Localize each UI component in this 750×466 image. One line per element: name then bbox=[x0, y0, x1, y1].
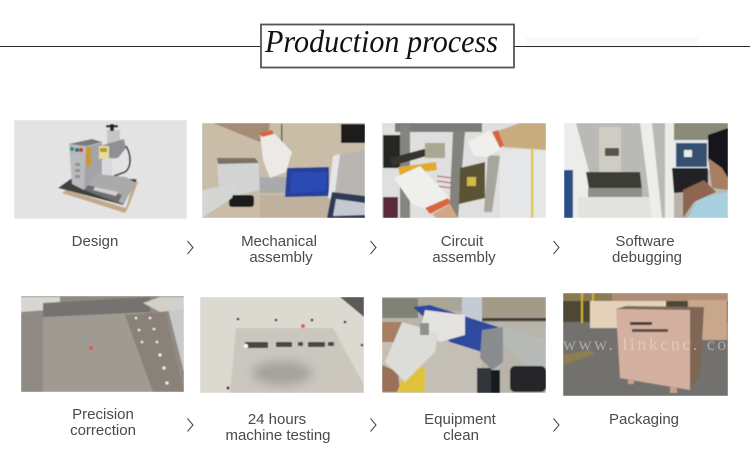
step 6: 24 hours machine testing bbox=[200, 297, 364, 444]
label bbox=[612, 233, 682, 266]
photo: marked steel plate on table bbox=[200, 297, 364, 393]
label bbox=[432, 233, 496, 266]
label: debugging bbox=[612, 249, 682, 266]
step 5: precision correction bbox=[21, 296, 184, 439]
step 4: software debugging bbox=[564, 123, 728, 266]
photo: gloved hands wiring circuit bbox=[382, 123, 546, 218]
label: Packaging bbox=[609, 411, 679, 428]
photo: metal plate with red laser point bbox=[21, 296, 184, 392]
arrow bbox=[188, 418, 193, 432]
arrow bbox=[554, 241, 559, 254]
step 1: design bbox=[14, 120, 187, 250]
photo: laser marking machine on pallet bbox=[14, 120, 187, 219]
step 7: equipment clean bbox=[382, 297, 546, 444]
photo: engineer at laptop beside cabinet bbox=[564, 123, 728, 218]
label: Software bbox=[615, 233, 675, 250]
label: assembly bbox=[249, 249, 313, 266]
label bbox=[241, 233, 317, 266]
arrow bbox=[370, 241, 376, 254]
label: Circuit bbox=[441, 233, 484, 250]
photo: wooden crate in warehouse bbox=[563, 293, 728, 396]
step 2: mechanical assembly bbox=[202, 123, 365, 266]
step 8: packaging bbox=[563, 293, 728, 427]
arrow bbox=[554, 418, 559, 432]
label: Precision bbox=[72, 406, 134, 423]
label: assembly bbox=[432, 249, 496, 266]
label: Mechanical bbox=[241, 233, 317, 250]
title: Production process bbox=[264, 23, 498, 59]
label: machine testing bbox=[225, 427, 331, 444]
photo: gloved hand spraying laser head bbox=[382, 297, 546, 393]
step 3: circuit assembly bbox=[382, 123, 546, 266]
label: clean bbox=[443, 427, 479, 444]
label: Equipment bbox=[424, 411, 497, 428]
title banner bbox=[0, 23, 750, 68]
photo: gloved hands mounting galvo head bbox=[202, 123, 365, 218]
label bbox=[225, 411, 331, 444]
watermark text on photo: www. linkcnc. com bbox=[563, 334, 745, 354]
arrow bbox=[188, 241, 193, 254]
arrow bbox=[370, 418, 376, 432]
label: correction bbox=[70, 422, 136, 439]
label bbox=[424, 411, 497, 444]
label: Design bbox=[72, 233, 118, 250]
label: 24 hours bbox=[248, 411, 306, 428]
label bbox=[70, 406, 136, 439]
